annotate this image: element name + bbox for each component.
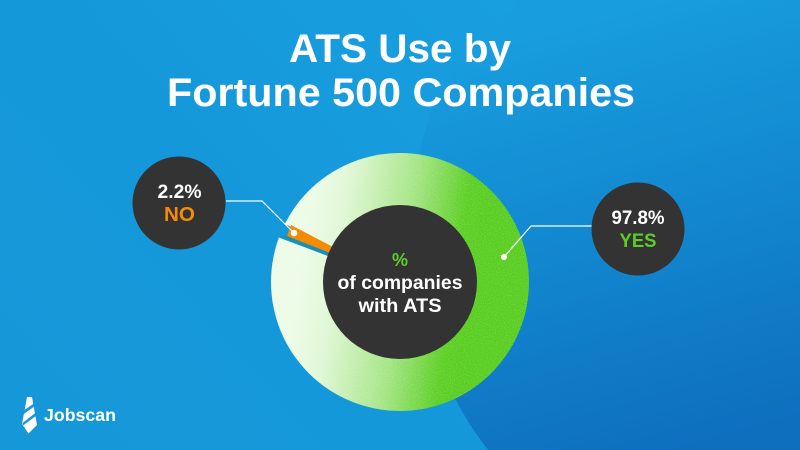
title: [167, 27, 635, 115]
center label: %: [392, 250, 408, 270]
segment: no 2.2%: [287, 225, 333, 252]
center label: of companies: [338, 273, 462, 294]
leader line: [504, 226, 592, 257]
callout: NO: 2.2%: [158, 182, 202, 203]
teal edge: [279, 236, 330, 256]
center label: with ATS: [357, 296, 442, 317]
logo: Jobscan: [22, 397, 116, 434]
title: ATS Use by: [289, 27, 512, 71]
donut chart: [271, 153, 529, 411]
background darker curved shape: [411, 0, 800, 450]
gap between segments: [272, 224, 332, 256]
callout: YES: YES: [620, 231, 656, 252]
texture grain: [271, 153, 529, 411]
center label: [338, 250, 462, 317]
callout: YES: 97.8%: [612, 208, 665, 229]
segment: yes 97.8%: [271, 153, 529, 411]
callout: NO: [132, 156, 297, 250]
logo: Jobscan: Jobscan: [44, 405, 116, 425]
center circle: [323, 205, 477, 359]
icon: tie: [22, 397, 37, 434]
callout: YES: [501, 182, 684, 276]
callout: NO: NO: [164, 204, 195, 226]
title: Fortune 500 Companies: [167, 71, 635, 115]
leader line: [226, 201, 294, 233]
